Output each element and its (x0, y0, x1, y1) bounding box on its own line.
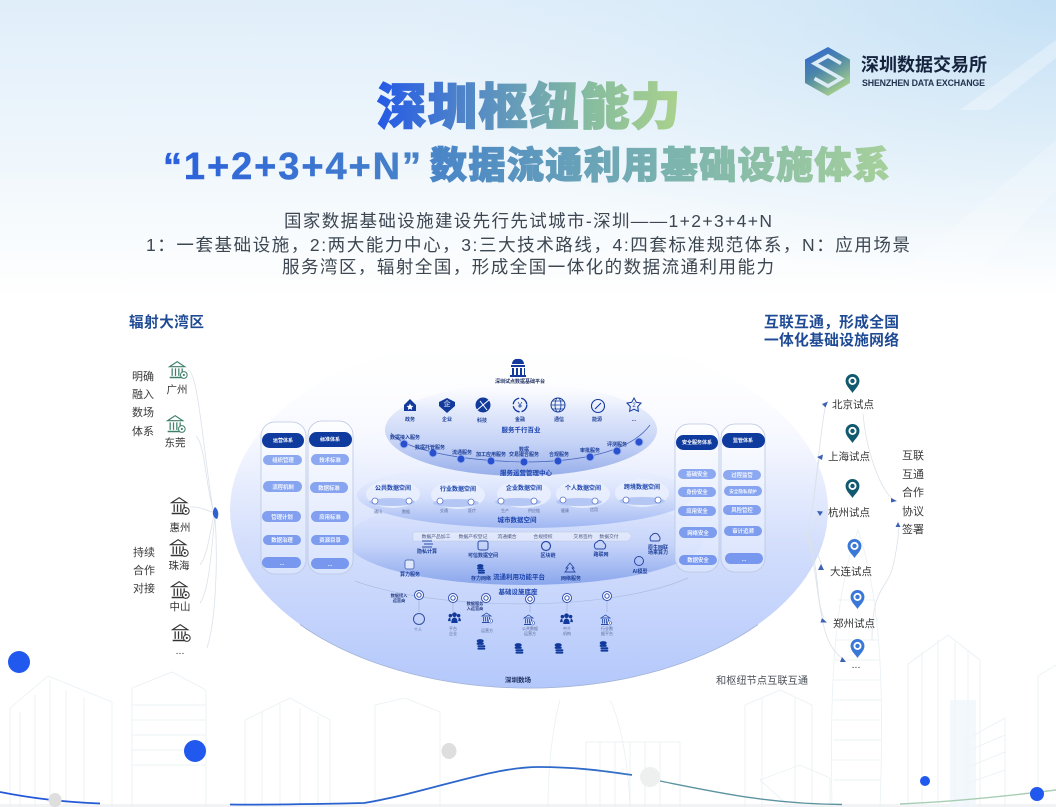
subtitle (163, 135, 890, 189)
node captions: 数据服务 (467, 600, 484, 607)
panel items (678, 469, 717, 565)
service node labels: 流通服务 (452, 449, 472, 456)
panel items: 身份安全 (686, 488, 708, 496)
pilot: Zhengzhou (833, 590, 875, 630)
node captions: 运营商 (393, 597, 405, 604)
city: Zhuhai: 珠海 (168, 559, 190, 572)
process chevrons: 数据产品加工 (422, 533, 451, 540)
process chevrons: 交易签约 (573, 533, 593, 540)
data space captions: 供应链 (528, 507, 540, 513)
service node labels: 评测服务 (607, 441, 627, 448)
panel items: 应用安全 (686, 507, 708, 515)
data space names (375, 483, 660, 493)
service node labels (390, 434, 627, 458)
service node labels: 交易撮合服务 (509, 451, 539, 458)
panel items: 资源目录 (319, 536, 341, 544)
icon: communication: 通信 (554, 416, 564, 423)
icon: communication (551, 398, 565, 423)
data space names: 行业数据空间 (440, 485, 476, 493)
platform name: 深圳试点数据基础平台 (495, 378, 545, 385)
icon: energy: 能源 (592, 416, 602, 423)
left text: integrate: 明确 (132, 370, 154, 383)
icon: finance: 金融 (515, 416, 525, 423)
left text: cooperate: 对接 (133, 581, 155, 595)
label: serve all industries: 服务千行百业 (502, 425, 541, 434)
panel items: 安全隐私保护 (729, 488, 757, 495)
pilot: Hangzhou: 杭州试点 (828, 506, 870, 519)
service node labels: 审批服务 (580, 447, 600, 454)
participant labels: 中介 (563, 625, 571, 631)
service node labels: 数据接入服务 (390, 434, 420, 441)
city: Dongguan (164, 416, 186, 449)
label: Shenzhen data field: 深圳数场 (505, 675, 532, 684)
decorative dots (8, 651, 1044, 807)
process chevrons: 数据产权登记 (459, 533, 488, 540)
pilot: Beijing (832, 374, 874, 411)
data space captions: 交通 (440, 507, 448, 513)
icons and labels: technologies: 网络服务 (561, 575, 581, 582)
panel items: 应用标准 (319, 513, 341, 521)
city: more (173, 625, 190, 657)
left text: integrate (132, 370, 154, 438)
data space captions (374, 506, 598, 514)
data space names: 企业数据空间 (506, 484, 542, 492)
icons and labels: technologies: 区块链 (540, 552, 556, 559)
icons and labels: technologies: 路联网 (593, 551, 609, 558)
pilot: Dalian (830, 539, 872, 578)
service node labels: 数据 (519, 446, 529, 453)
panel items: 数据治理 (271, 536, 293, 544)
panel header (309, 432, 352, 447)
title: 深圳枢纽能力 (377, 68, 680, 139)
data space bands (369, 497, 665, 507)
icon: enterprise (439, 398, 455, 423)
label: city data space: 城市数据空间 (498, 515, 537, 524)
data space captions: 信用 (590, 506, 598, 512)
process chevrons: 数据交付 (599, 533, 619, 540)
panel header: 监管体系 (733, 437, 753, 444)
icon: government: 政务 (405, 416, 415, 423)
icon: finance (513, 398, 527, 423)
service nodes (400, 438, 643, 466)
city skyline background (10, 530, 1056, 807)
panel items (310, 454, 349, 569)
panel items: 基础安全 (686, 470, 708, 478)
icon: enterprise: 企 (444, 399, 450, 408)
subtitle: 数据流通利用基础设施体系 (430, 135, 890, 189)
left connector curves (188, 370, 218, 648)
right text: interconnection agreement (902, 449, 924, 536)
city: Guangzhou (166, 362, 188, 396)
panel items: ... (328, 562, 333, 568)
intro text (146, 211, 910, 277)
main diagram disk: Shenzhen data field (230, 332, 828, 688)
intro text: 1：一套基础设施，2:两大能力中心，3:三大技术路线，4:四套标准规范体系，N：应用场景 (146, 235, 910, 255)
panel items: ... (280, 561, 285, 567)
city: Zhongshan (170, 582, 190, 613)
city: Huizhou: 惠州 (170, 521, 190, 534)
participant labels: 运营方 (481, 627, 493, 633)
icons and labels: technologies: 存力网络 (471, 575, 491, 582)
left text: cooperate (133, 545, 155, 595)
layer: infrastructure base (355, 578, 688, 654)
heading: national network: 互联互通，形成全国 (764, 313, 899, 331)
data space names: 公共数据空间 (375, 484, 411, 492)
icon: logo hexagon (805, 47, 850, 96)
city: Huizhou (170, 498, 190, 534)
icons and labels: technologies: 原生网联 (648, 544, 668, 551)
data space nodes (372, 497, 661, 505)
icon: technology (476, 398, 490, 424)
icon: more: ... (632, 417, 637, 423)
pilot: Dalian: 大连试点 (830, 565, 872, 578)
pilot: Hangzhou (828, 479, 870, 519)
icon: more (627, 398, 641, 423)
city: Dongguan: 东莞 (164, 436, 186, 449)
right text: interconnection agreement: 互通 (902, 468, 924, 481)
participant labels: 据平台 (601, 630, 613, 636)
icons and labels: technologies: AI模型 (632, 568, 648, 575)
participant labels: 公共数据 (522, 625, 538, 631)
node row (414, 590, 612, 604)
data space mounds (366, 479, 669, 509)
data space captions: 医疗 (468, 507, 476, 513)
panel items: 网络安全 (687, 529, 709, 537)
pilot: more (851, 639, 864, 671)
pilot: Beijing: 北京试点 (832, 398, 874, 411)
intro text: 国家数据基础设施建设先行先试城市-深圳——1+2+3+4+N (284, 211, 772, 231)
panel items: 组织管理 (272, 456, 294, 464)
layer: service operations (385, 384, 657, 477)
data space captions: 生产 (501, 507, 509, 513)
panel items: 流程机制 (272, 483, 294, 491)
panel header: 标准体系 (320, 436, 340, 443)
right text: interconnection agreement: 协议 (902, 504, 924, 518)
participant labels: 机构 (563, 630, 571, 636)
icons: data stores (477, 639, 608, 654)
participant labels (414, 625, 613, 636)
subtitle: “1+2+3+4+N” (163, 146, 421, 188)
participant labels: 平台 (449, 625, 457, 631)
panel items: 审计追溯 (732, 527, 754, 535)
right pilot site list (828, 374, 875, 671)
icons and labels: technologies (400, 533, 668, 582)
panel items: ... (742, 557, 747, 563)
panel header: 安全服务体系 (682, 439, 712, 446)
left city list (164, 362, 190, 657)
node captions: 入运营商 (467, 605, 483, 612)
process chevrons: 流通撮合 (497, 533, 517, 540)
city: Guangzhou: 广州 (166, 384, 188, 396)
participant labels: 行业数 (601, 625, 613, 631)
panel header (676, 435, 718, 450)
logo name: 深圳数据交易所 (861, 54, 987, 75)
icons and labels: technologies: 隐私计算 (417, 548, 437, 555)
left text: cooperate: 合作 (133, 563, 155, 577)
pilot: Shanghai (828, 424, 870, 463)
icon: technology: 科技 (477, 417, 487, 424)
icons and labels: technologies: 可信数据空间 (468, 552, 498, 559)
city: Zhuhai (168, 540, 190, 572)
pilot: Shanghai: 上海试点 (828, 450, 870, 463)
panel: standards system (308, 421, 353, 574)
node captions: 数据接入 (391, 592, 408, 599)
icons: participants (414, 612, 612, 625)
participant labels: 个人 (414, 627, 422, 632)
service node labels: 加工应用服务 (476, 451, 506, 458)
pilot: Zhengzhou: 郑州试点 (833, 617, 875, 630)
icon: energy (592, 400, 604, 423)
bottom wave (0, 767, 1056, 805)
panel: operations system (261, 422, 306, 574)
layer: circulation platform (347, 495, 703, 585)
layer: city data spaces (357, 462, 693, 528)
right connector curves and arrows (805, 402, 900, 662)
node captions (391, 592, 484, 612)
panel items (723, 470, 763, 564)
right text: interconnection agreement: 签署 (902, 522, 924, 536)
service node labels: 合规服务 (549, 451, 569, 458)
heading: radiate bay area: 辐射大湾区 (129, 313, 204, 331)
panel header (722, 433, 765, 448)
panel items: 风险管控 (731, 506, 753, 514)
top platform icon (495, 359, 545, 385)
city: Zhongshan: 中山 (170, 600, 190, 613)
label: infrastructure base: 基础设施底座 (498, 587, 538, 596)
data space names: 个人数据空间 (565, 484, 601, 492)
icon: more: 2 (632, 403, 636, 409)
city: more: ... (176, 645, 184, 657)
panel header (262, 433, 304, 448)
left text: integrate: 融入 (132, 388, 154, 401)
industry icons row (404, 398, 641, 424)
heading: national network (764, 313, 899, 349)
participant labels: 企业 (449, 630, 457, 636)
panel items (262, 455, 302, 568)
data space names: 跨境数据空间 (624, 483, 660, 491)
data space captions: 健康 (561, 507, 569, 513)
icons and labels: technologies: 场来算力 (648, 549, 668, 556)
label: service operations center: 服务运营管理中心 (500, 468, 552, 477)
right text: interconnection agreement: 合作 (902, 485, 924, 499)
panel items: 技术标准 (319, 456, 341, 464)
caption: interconnect with hub nodes: 和枢纽节点互联互通 (716, 674, 808, 687)
icon: enterprise: 企业 (442, 416, 452, 423)
intro text: 服务湾区，辐射全国，形成全国一体化的数据流通利用能力 (282, 257, 774, 277)
data space captions: 通讯 (374, 508, 382, 514)
panel items: 过程监管 (731, 471, 753, 479)
service node labels: 数据托管服务 (415, 444, 445, 451)
pilot: more: ... (852, 659, 860, 671)
process chevrons (413, 532, 632, 541)
panel items: 数据安全 (687, 556, 709, 564)
service chain line (391, 425, 650, 462)
process chevrons: 合规授权 (533, 533, 553, 540)
icon: government (404, 399, 416, 423)
logo: Shenzhen Data Exchange (805, 47, 987, 96)
icon: finance: ¥ (517, 401, 523, 410)
label: circulation platform: 流通利用功能平台 (493, 572, 546, 581)
panel items: 管理计划 (271, 513, 293, 521)
icons and labels: technologies: 算力服务 (400, 571, 420, 578)
panel: supervision system (721, 424, 765, 572)
panel: security service system (675, 424, 719, 572)
heading: national network: 一体化基础设施网络 (764, 331, 899, 349)
right text: interconnection agreement: 互联 (902, 449, 924, 462)
panel header: 运营体系 (273, 437, 293, 444)
data space captions: 数据 (402, 508, 410, 514)
left text: integrate: 体系 (132, 424, 154, 438)
logo english name: SHENZHEN DATA EXCHANGE (862, 78, 985, 88)
panel items: 数据标准 (318, 484, 340, 492)
left text: cooperate: 持续 (133, 545, 155, 559)
left text: integrate: 数场 (132, 405, 154, 419)
participant labels: 运营方 (524, 630, 536, 636)
